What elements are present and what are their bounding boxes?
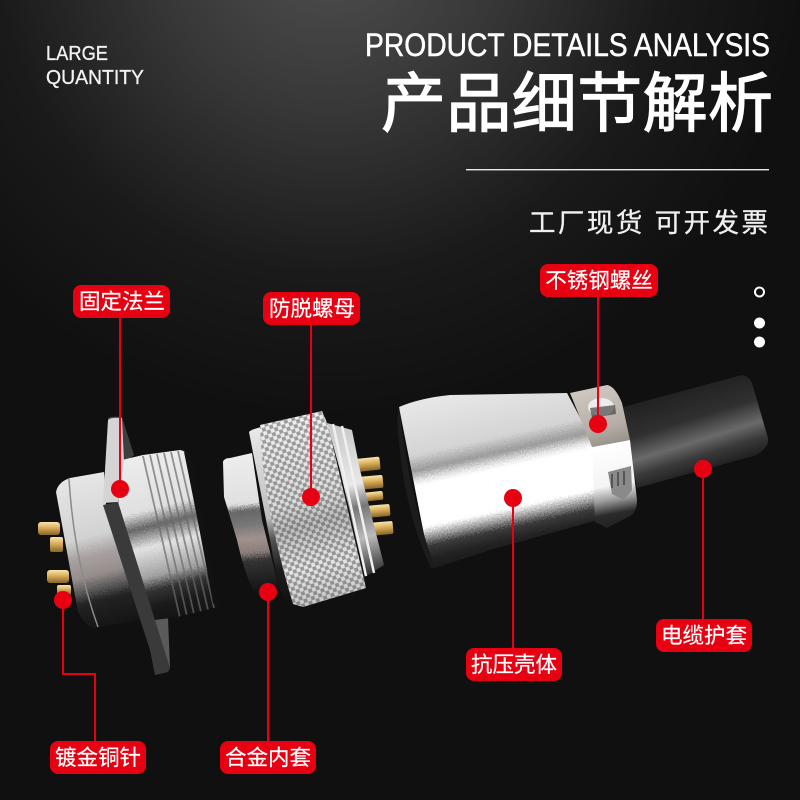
product: flange connector [38, 417, 225, 675]
callout: cable sleeve: 电缆护套 [661, 624, 747, 648]
pagination dots [754, 288, 765, 348]
text: large: LARGE [46, 43, 108, 65]
text: quantity: QUANTITY [46, 67, 144, 89]
rubber sleeve [620, 375, 768, 488]
flange back ear [108, 417, 134, 462]
knurled ring [260, 411, 366, 607]
gold pins [38, 522, 71, 595]
callout: cable sleeve [656, 460, 752, 652]
rear thread [327, 423, 384, 577]
callout: pressure shell [466, 489, 562, 681]
metal shell [399, 393, 595, 568]
callout: alloy inner sleeve: 合金内套 [225, 746, 311, 770]
callout: anti-loosening nut [263, 292, 360, 506]
threaded barrel [118, 450, 210, 620]
product: knurled nut [215, 411, 394, 607]
flange front edge [103, 502, 170, 675]
callout: pressure shell: 抗压壳体 [471, 653, 557, 677]
callout: stainless screw: 不锈钢螺丝 [545, 269, 653, 293]
rear body [56, 472, 137, 625]
callout: gold pin: 镀金铜针 [55, 746, 141, 770]
callout: fixed flange [73, 285, 170, 498]
clamp band upper [570, 385, 630, 447]
clamp upper screw [588, 398, 614, 416]
shell dark rim [397, 407, 435, 568]
flange top ear [103, 418, 124, 503]
barrel opening [184, 452, 219, 607]
callout: anti-loosening nut: 防脱螺母 [269, 297, 355, 321]
text: subtitle: 工厂现货 可开发票 [529, 208, 768, 238]
clamp lower screw [608, 466, 632, 500]
callout: fixed flange: 固定法兰 [79, 290, 165, 314]
heading: Chinese title: 产品细节解析 [381, 67, 773, 140]
product: shell with clamp and cable sleeve [390, 375, 768, 575]
clamp band lower [592, 440, 637, 528]
thread grooves [143, 451, 214, 618]
callout: gold pin [50, 591, 146, 774]
rear cylinder [223, 453, 278, 588]
gold pins [351, 457, 394, 536]
callout: stainless screw [540, 264, 658, 433]
callout: alloy inner sleeve [220, 583, 316, 774]
collar [249, 427, 296, 607]
